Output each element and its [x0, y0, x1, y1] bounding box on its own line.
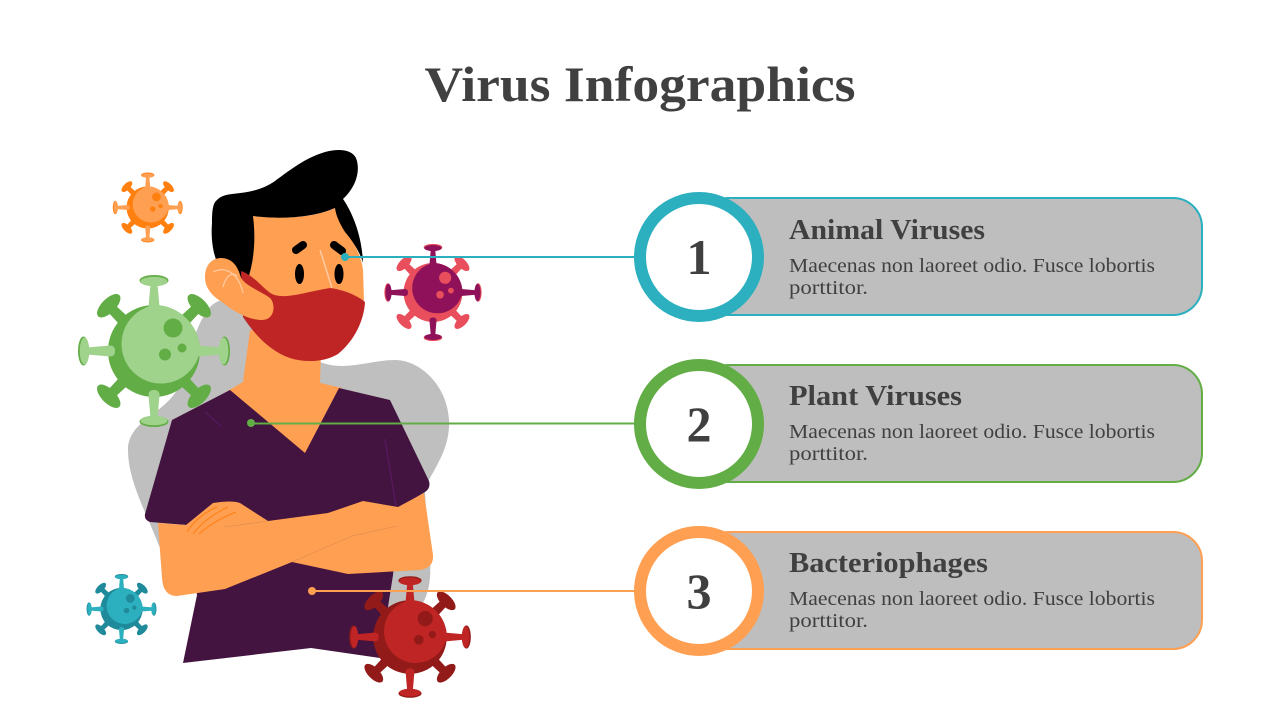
heading: Bacteriophages [789, 548, 988, 579]
description: porttitor. [789, 610, 868, 632]
card background [700, 532, 1202, 649]
eyebrows [296, 245, 342, 251]
shirt folds [205, 412, 396, 506]
icon: red virus [349, 576, 471, 698]
heading: Animal Viruses [789, 215, 985, 246]
number badge [640, 198, 758, 316]
illustration: person with mask [145, 150, 433, 663]
neck and chest skin [226, 330, 342, 460]
icon: teal virus [87, 574, 156, 644]
description: porttitor. [789, 443, 868, 465]
ear [205, 258, 274, 320]
description: Maecenas non laoreet odio. Fusce lobortis [789, 588, 1155, 610]
heading: Plant Viruses [789, 381, 962, 412]
hair [212, 150, 363, 282]
number badge: 2 [686, 396, 712, 452]
description: porttitor. [789, 277, 868, 299]
number badge [640, 532, 758, 650]
face [245, 208, 364, 345]
description: Maecenas non laoreet odio. Fusce lobortis [789, 255, 1155, 277]
nose line [320, 250, 332, 288]
eyes [295, 264, 344, 284]
connector line [247, 419, 640, 427]
panel: animal viruses [341, 198, 1202, 316]
connector line [341, 253, 640, 261]
card background [700, 198, 1202, 315]
number badge [640, 365, 758, 483]
infographic canvas [78, 66, 1203, 698]
ear lines [213, 270, 243, 293]
mask [241, 271, 365, 361]
crossed arms [158, 493, 433, 596]
description: Maecenas non laoreet odio. Fusce lobortis [789, 421, 1155, 443]
description [789, 421, 1155, 465]
card background [700, 365, 1202, 482]
description [789, 588, 1155, 632]
panel: bacteriophages [308, 532, 1202, 650]
connector line [308, 587, 640, 595]
icon: orange virus [113, 173, 183, 242]
arm creases [187, 507, 236, 534]
shirt [145, 388, 430, 663]
panel: plant viruses [247, 365, 1202, 483]
title: Virus Infographics [424, 56, 856, 112]
number badge: 3 [686, 563, 712, 619]
description [789, 255, 1155, 299]
icon: green virus [78, 275, 230, 427]
number badge: 1 [686, 229, 712, 285]
icon: magenta virus [384, 244, 482, 341]
grey background blob [128, 300, 449, 622]
